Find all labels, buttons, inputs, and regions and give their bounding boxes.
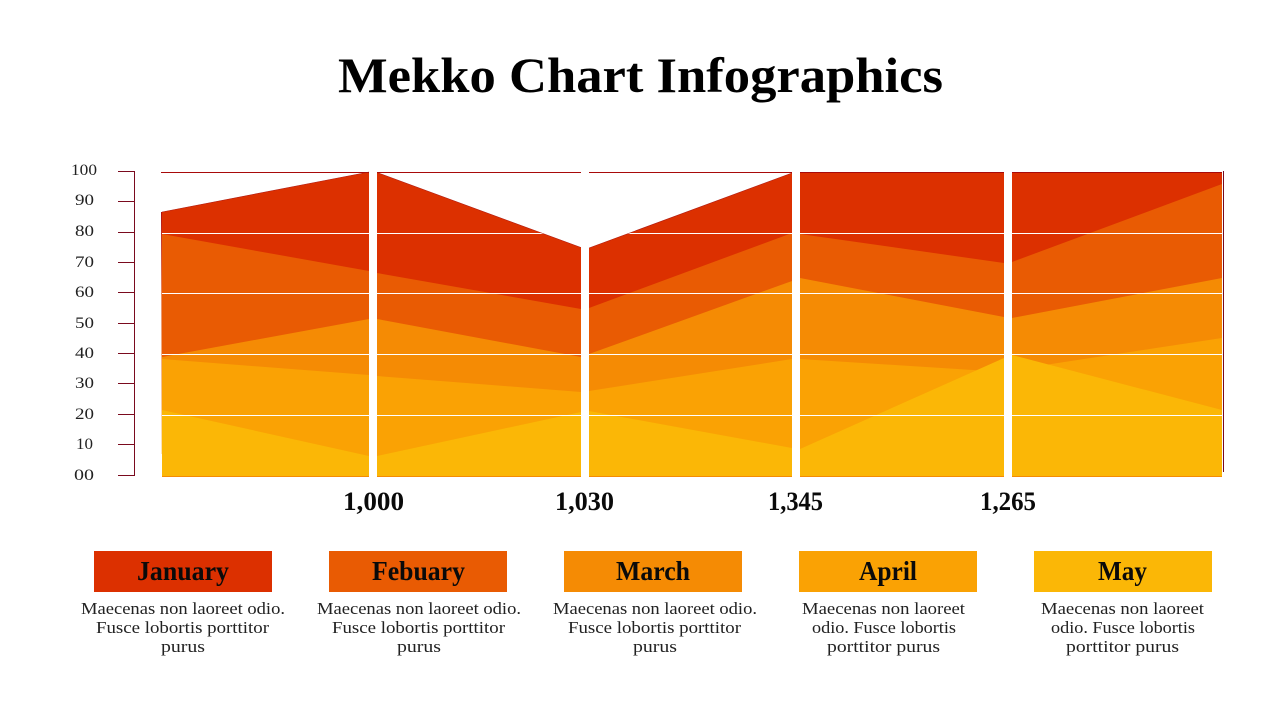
legend: March: purus (633, 637, 677, 656)
legend: March: Maecenas non laoreet odio. (553, 599, 757, 618)
y axis: 10 (76, 436, 93, 453)
legend: April: porttitor purus (827, 637, 940, 656)
legend: April: April (859, 556, 917, 586)
legend: March: Fusce lobortis porttitor (568, 618, 742, 637)
column width labels (343, 487, 1036, 516)
y axis (71, 162, 135, 484)
legend: May: May (1098, 556, 1147, 586)
legend: May: Maecenas non laoreet (1041, 599, 1204, 618)
y axis: 60 (75, 284, 94, 301)
y axis: 100 (71, 162, 97, 179)
grid lines (161, 234, 1223, 416)
legend: Febuary (317, 551, 521, 656)
y axis: 80 (75, 223, 94, 240)
legend: April: odio. Fusce lobortis (812, 618, 956, 637)
slope outline (162, 172, 792, 248)
legend: Febuary: Maecenas non laoreet odio. (317, 599, 521, 618)
y axis: 30 (75, 375, 94, 392)
y axis: 40 (75, 345, 94, 362)
legend: January: Fusce lobortis porttitor (96, 618, 270, 637)
y axis: 70 (75, 254, 94, 271)
column width labels: 1,000 (343, 487, 404, 516)
right edge (1222, 171, 1224, 472)
column width labels: 1,265 (980, 487, 1036, 516)
legend: May: porttitor purus (1066, 637, 1179, 656)
y axis: 90 (75, 192, 94, 209)
legend: January: Maecenas non laoreet odio. (81, 599, 285, 618)
legend: Febuary: Febuary (372, 556, 465, 586)
legend: January: purus (161, 637, 205, 656)
legend: Febuary: Fusce lobortis porttitor (332, 618, 506, 637)
y axis: 50 (75, 315, 94, 332)
legend: May (1034, 551, 1212, 656)
legend: January: January (137, 556, 229, 586)
layer: Febuary (162, 184, 1222, 477)
top line (161, 172, 1222, 174)
layer: May (162, 355, 1222, 477)
legend: April (799, 551, 977, 656)
column width labels: 1,030 (555, 487, 614, 516)
baseline (162, 476, 1222, 478)
legend: March: March (616, 556, 690, 586)
column gaps (369, 165, 1012, 477)
column width labels: 1,345 (768, 487, 823, 516)
layer: January (162, 172, 1222, 477)
legend: Febuary: purus (397, 637, 441, 656)
legend: May: odio. Fusce lobortis (1051, 618, 1195, 637)
y axis: 00 (74, 467, 94, 484)
title: Mekko Chart Infographics (338, 47, 943, 103)
layer: April (162, 338, 1222, 477)
legend: January (81, 551, 285, 656)
mekko chart (161, 165, 1224, 477)
y axis: 20 (75, 406, 94, 423)
layer: March (162, 278, 1222, 477)
legend: March (553, 551, 757, 656)
legend: April: Maecenas non laoreet (802, 599, 965, 618)
left edge (160, 212, 162, 454)
